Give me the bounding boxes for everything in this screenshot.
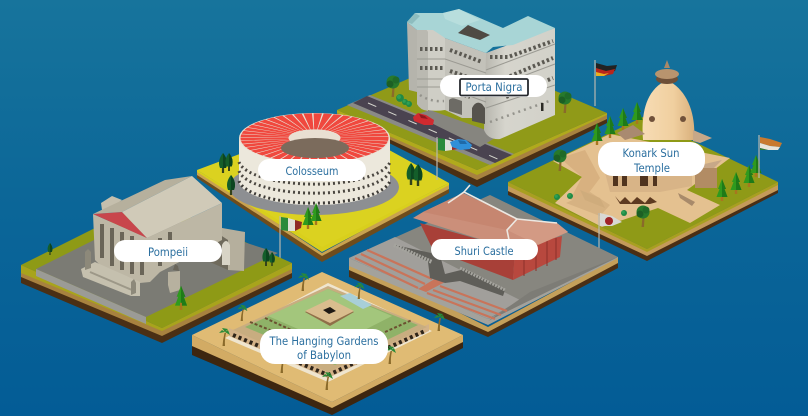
base ring [229,159,399,215]
label: Pompeii [114,240,222,262]
panel: Pompeii tile [21,176,292,343]
icon: Indian flag [759,135,782,178]
gable [93,212,147,238]
label: Konark Sun Temple [598,142,705,176]
label: Pompeii: Pompeii [148,245,188,259]
panel: Porta Nigra tile [337,9,617,187]
icon: red car [413,113,434,125]
label: The Hanging Gardens of Babylon: of Babylon [297,348,351,362]
building: Hanging Gardens [225,283,432,382]
label: Konark Sun Temple: Konark Sun [622,146,680,160]
label: Colosseum: Colosseum [286,164,338,178]
roof [407,9,555,53]
sand courtyard [553,134,730,227]
building: Porta Nigra [407,9,555,139]
icon: right conifers and deciduous trees [554,150,762,227]
arena [281,138,349,158]
building: Pompeii temple [81,176,245,296]
panel: Shuri Castle tile [349,185,618,337]
label text: Porta Nigra [466,80,522,94]
panel: Hanging Gardens tile [192,272,463,415]
seating [264,121,364,155]
icon: German flag [595,60,617,106]
icon: blue car [450,139,472,150]
building: Konark temple [580,60,722,208]
icon: trees and bushes [386,76,572,113]
panel: Konark Sun Temple tile [508,60,782,261]
icon: Japanese flag [599,213,622,257]
building: Shuri Castle [394,185,568,296]
label: Porta Nigra [440,75,547,97]
label: Shuri Castle: Shuri Castle [454,244,514,258]
road [347,95,514,165]
icon: Italian flag [280,216,302,260]
window rows [420,41,553,97]
icon: conifers [219,153,422,229]
icon: conifers [48,243,275,310]
icon: left conifers [592,102,642,145]
icon: palm trees [219,273,445,390]
label: Shuri Castle [431,239,538,260]
roof [93,176,192,214]
label: The Hanging Gardens of Babylon: The Hanging Gardens [269,334,379,348]
label: The Hanging Gardens of Babylon [260,329,388,364]
label: Konark Sun Temple: Temple [633,161,670,175]
building: Colosseum [239,113,390,205]
panel: Colosseum tile [197,113,459,262]
icon: Italian flag [437,137,459,180]
label: Colosseum [258,159,366,181]
red stripes [355,250,507,319]
gray pavement [36,212,278,317]
focus ring [460,79,528,96]
plaza [415,110,500,147]
